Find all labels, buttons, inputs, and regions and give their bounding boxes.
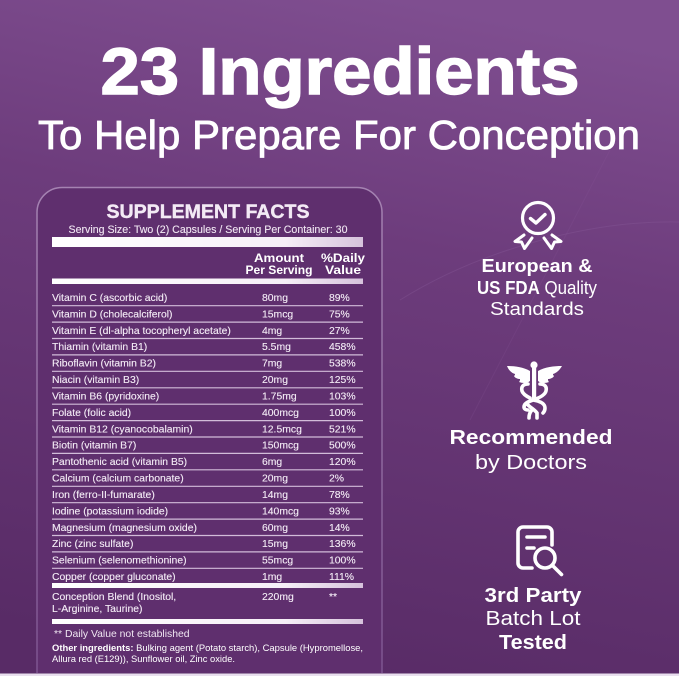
nutrient table rows: 15mcg <box>262 309 293 320</box>
nutrient table rows: Vitamin B6 (pyridoxine) <box>52 392 159 402</box>
nutrient table rows: 1mg <box>262 572 282 583</box>
nutrient table rows: Zinc (zinc sulfate) <box>52 539 133 550</box>
text: third party tested: Batch Lot <box>486 608 581 630</box>
other ingredients <box>52 643 363 664</box>
nutrient table rows: Copper (copper gluconate) <box>52 572 176 583</box>
nutrient table rows: 93% <box>329 506 350 517</box>
serving size: Serving Size: Two (2) Capsules / Serving Per Container: 30 <box>68 224 348 236</box>
text: quality standards: Standards <box>490 298 584 319</box>
panel: supplement facts <box>37 188 382 673</box>
nutrient table rows: Folate (folic acid) <box>52 408 131 419</box>
text: recommended by doctors: Recommended <box>450 426 612 449</box>
nutrient table rows: 538% <box>329 359 356 370</box>
nutrient table rows: Vitamin B12 (cyanocobalamin) <box>52 424 193 435</box>
other ingredients: Allura red (E129)), Sunflower oil, Zinc oxide. <box>52 654 235 664</box>
nutrient table rows: 60mg <box>262 523 288 534</box>
nutrient table rows: Vitamin E (dl-alpha tocopheryl acetate) <box>52 326 231 337</box>
footnote: ** Daily Value not established <box>54 629 190 640</box>
column header: amount <box>246 251 312 277</box>
nutrient table rows: 5.5mg <box>262 342 291 353</box>
nutrient table rows: Vitamin C (ascorbic acid) <box>52 293 167 304</box>
nutrient table rows: 140mcg <box>262 506 299 517</box>
text: recommended by doctors <box>450 426 612 474</box>
nutrient table rows <box>52 293 363 583</box>
text: third party tested: 3rd Party <box>484 585 582 607</box>
conception blend row: 220mg <box>262 592 294 603</box>
icon: caduceus <box>507 361 562 418</box>
nutrient table rows: 150mcg <box>262 441 299 452</box>
nutrient table rows: 125% <box>329 375 356 386</box>
nutrient table rows: 75% <box>329 309 350 320</box>
conception blend row: ** <box>329 592 337 603</box>
nutrient table rows: Selenium (selenomethionine) <box>52 556 187 567</box>
nutrient table rows: 1.75mg <box>262 392 297 402</box>
nutrient table rows: Iron (ferro-II-fumarate) <box>52 490 155 501</box>
nutrient table rows: Vitamin D (cholecalciferol) <box>52 309 172 320</box>
nutrient table rows: 100% <box>329 408 356 419</box>
nutrient table rows: 7mg <box>262 359 282 370</box>
nutrient table rows: 89% <box>329 293 350 304</box>
nutrient table rows: Pantothenic acid (vitamin B5) <box>52 457 187 468</box>
conception blend row <box>52 592 337 615</box>
nutrient table rows: 458% <box>329 342 356 353</box>
nutrient table rows: 20mg <box>262 375 288 386</box>
nutrient table rows: 20mg <box>262 474 288 485</box>
text: third party tested: Tested <box>499 632 567 654</box>
icon: document with magnifier <box>518 527 562 574</box>
column header: amount: Per Serving <box>246 263 312 277</box>
conception blend row: Conception Blend (Inositol, <box>52 592 176 603</box>
nutrient table rows: 111% <box>329 572 354 583</box>
text: quality standards <box>477 255 598 319</box>
nutrient table rows: 500% <box>329 441 356 452</box>
icon: medal <box>515 202 561 248</box>
nutrient table rows: Thiamin (vitamin B1) <box>52 342 147 353</box>
other ingredients: Other ingredients: Bulking agent (Potato starch), Capsule (Hypromellose, <box>52 643 363 653</box>
nutrient table rows: 55mcg <box>262 556 293 567</box>
column header: daily value <box>321 251 365 277</box>
column header: amount: Amount <box>254 251 304 265</box>
text: quality standards: US FDA Quality <box>477 277 598 298</box>
nutrient table rows: 15mg <box>262 539 288 550</box>
nutrient table rows: 78% <box>329 490 350 501</box>
nutrient table rows: Niacin (vitamin B3) <box>52 375 139 386</box>
nutrient table rows: 100% <box>329 556 356 567</box>
nutrient table rows: Magnesium (magnesium oxide) <box>52 523 197 534</box>
nutrient table rows: 27% <box>329 326 350 337</box>
nutrient table rows: Calcium (calcium carbonate) <box>52 474 184 485</box>
nutrient table rows: 6mg <box>262 457 282 468</box>
conception blend row: L-Arginine, Taurine) <box>52 604 142 615</box>
nutrient table rows: 14mg <box>262 490 288 501</box>
nutrient table rows: 80mg <box>262 293 288 304</box>
text: quality standards: European & <box>482 255 592 276</box>
text: recommended by doctors: by Doctors <box>475 451 587 474</box>
nutrient table rows: Riboflavin (vitamin B2) <box>52 359 156 370</box>
nutrient table rows: 12.5mcg <box>262 424 302 435</box>
subtitle: To Help Prepare For Conception <box>38 112 640 158</box>
nutrient table rows: 521% <box>329 424 356 435</box>
nutrient table rows: 4mg <box>262 326 282 337</box>
heading: supplement facts: SUPPLEMENT FACTS <box>106 202 310 223</box>
nutrient table rows: 136% <box>329 539 356 550</box>
text: third party tested <box>484 585 582 654</box>
nutrient table rows: 120% <box>329 457 356 468</box>
nutrient table rows: 400mcg <box>262 408 299 419</box>
nutrient table rows: Biotin (vitamin B7) <box>52 441 136 452</box>
title: 23 Ingredients <box>100 34 580 108</box>
nutrient table rows: 103% <box>329 392 356 402</box>
column header: daily value: %Daily <box>321 251 365 265</box>
nutrient table rows: 14% <box>329 523 350 534</box>
nutrient table rows: 2% <box>329 474 344 485</box>
nutrient table rows: Iodine (potassium iodide) <box>52 506 168 517</box>
column header: daily value: Value <box>325 263 361 277</box>
